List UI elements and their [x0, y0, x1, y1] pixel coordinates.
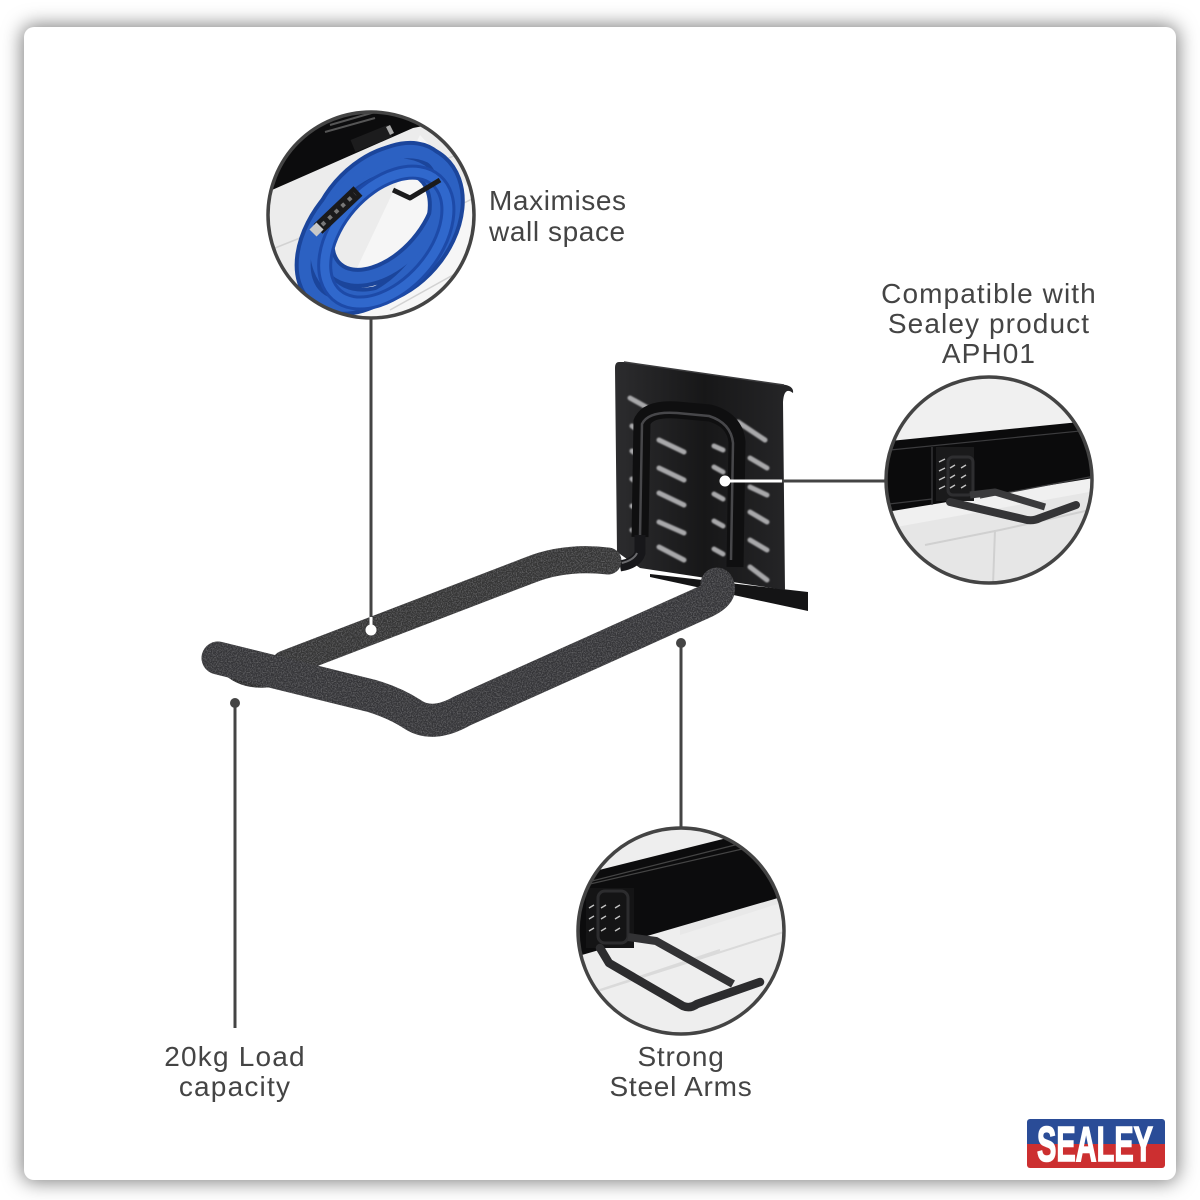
photo circle: hook below rail	[576, 826, 786, 1036]
hook front foam arm	[218, 584, 719, 720]
label: maximises wall space: wall space	[488, 216, 626, 247]
hook back plate	[615, 362, 808, 611]
photo circle: hose coiled on hook	[266, 110, 476, 320]
callout: strong steel arms	[570, 638, 795, 1102]
photo circle: hook on wall rail	[880, 370, 1100, 590]
product: wall hook	[218, 362, 808, 720]
leader line to back plate	[720, 476, 885, 486]
callout: maximises wall space	[260, 105, 627, 636]
leader line to front arm	[676, 638, 686, 827]
label: strong steel arms: Strong	[637, 1041, 725, 1072]
callout: compatible with APH01	[720, 278, 1100, 590]
label: strong steel arms: Steel Arms	[610, 1071, 752, 1102]
label: 20kg load capacity: capacity	[179, 1071, 291, 1102]
label: compatible with Sealey product APH01: Sealey product	[888, 308, 1090, 339]
infographic artwork	[166, 110, 1165, 1168]
label: compatible with Sealey product APH01: Compatible with	[881, 278, 1097, 309]
leader line to rear arm	[366, 319, 376, 636]
callout: 20kg load capacity	[164, 698, 306, 1102]
label: 20kg load capacity: 20kg Load	[164, 1041, 306, 1072]
leader line to front bar	[230, 698, 240, 1028]
label: compatible with Sealey product APH01: APH01	[942, 338, 1036, 369]
hook rear foam arm	[285, 560, 608, 664]
label: maximises wall space: Maximises	[489, 185, 627, 216]
